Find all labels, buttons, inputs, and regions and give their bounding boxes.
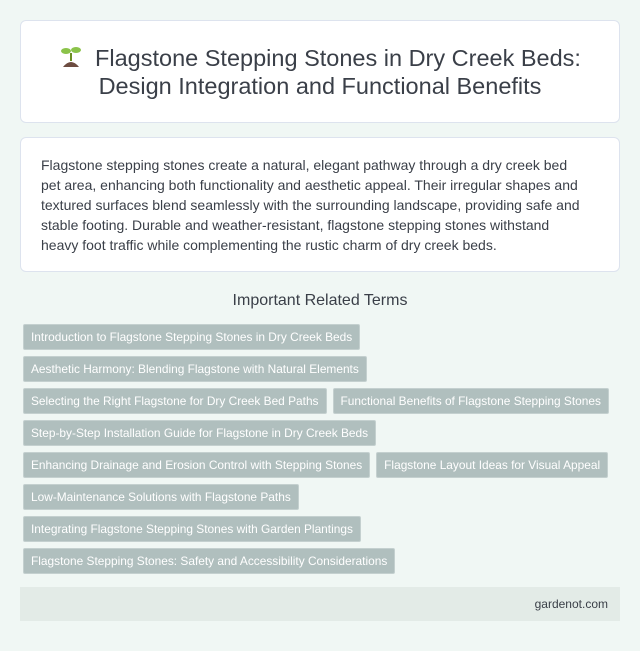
tag <box>23 420 376 446</box>
title: Flagstone Stepping Stones in Dry Creek Beds: Design Integration and Functional Benefits <box>95 45 581 99</box>
footer text: gardenot.com <box>535 597 608 611</box>
tag: Enhancing Drainage and Erosion Control with Stepping Stones <box>31 458 362 472</box>
header card <box>20 20 620 123</box>
description card <box>20 137 620 272</box>
tag: Flagstone Layout Ideas for Visual Appeal <box>384 458 600 472</box>
tag <box>23 516 361 542</box>
tag: Integrating Flagstone Stepping Stones with Garden Plantings <box>31 522 353 536</box>
description text: Flagstone stepping stones create a natural, elegant pathway through a dry creek bed pet area, enhancing both functionality and aesthetic appeal. Their irregular shapes and textured surfaces blend seamlessly with the surrounding landscape, providing safe and stable footing. Durable and weather-resistant, flagstone stepping stones withstand heavy foot traffic while complementing the rustic charm of dry creek beds. <box>41 157 580 253</box>
tag <box>23 484 299 510</box>
tag: Step-by-Step Installation Guide for Flagstone in Dry Creek Beds <box>31 426 368 440</box>
tag <box>23 452 370 478</box>
tag: Aesthetic Harmony: Blending Flagstone with Natural Elements <box>31 362 359 376</box>
tag <box>23 324 360 350</box>
tag <box>23 388 327 414</box>
tag <box>23 548 395 574</box>
tag <box>376 452 608 478</box>
footer <box>20 587 620 621</box>
tag: Low-Maintenance Solutions with Flagstone Paths <box>31 490 291 504</box>
tag: Functional Benefits of Flagstone Stepping Stones <box>341 394 601 408</box>
section heading: Important Related Terms <box>233 292 407 309</box>
tag: Selecting the Right Flagstone for Dry Creek Bed Paths <box>31 394 319 408</box>
icon: seedling <box>61 47 81 67</box>
tag: Flagstone Stepping Stones: Safety and Accessibility Considerations <box>31 554 387 568</box>
tag: Introduction to Flagstone Stepping Stones in Dry Creek Beds <box>31 330 352 344</box>
tags list <box>23 324 609 574</box>
tag <box>23 356 367 382</box>
tag <box>333 388 609 414</box>
